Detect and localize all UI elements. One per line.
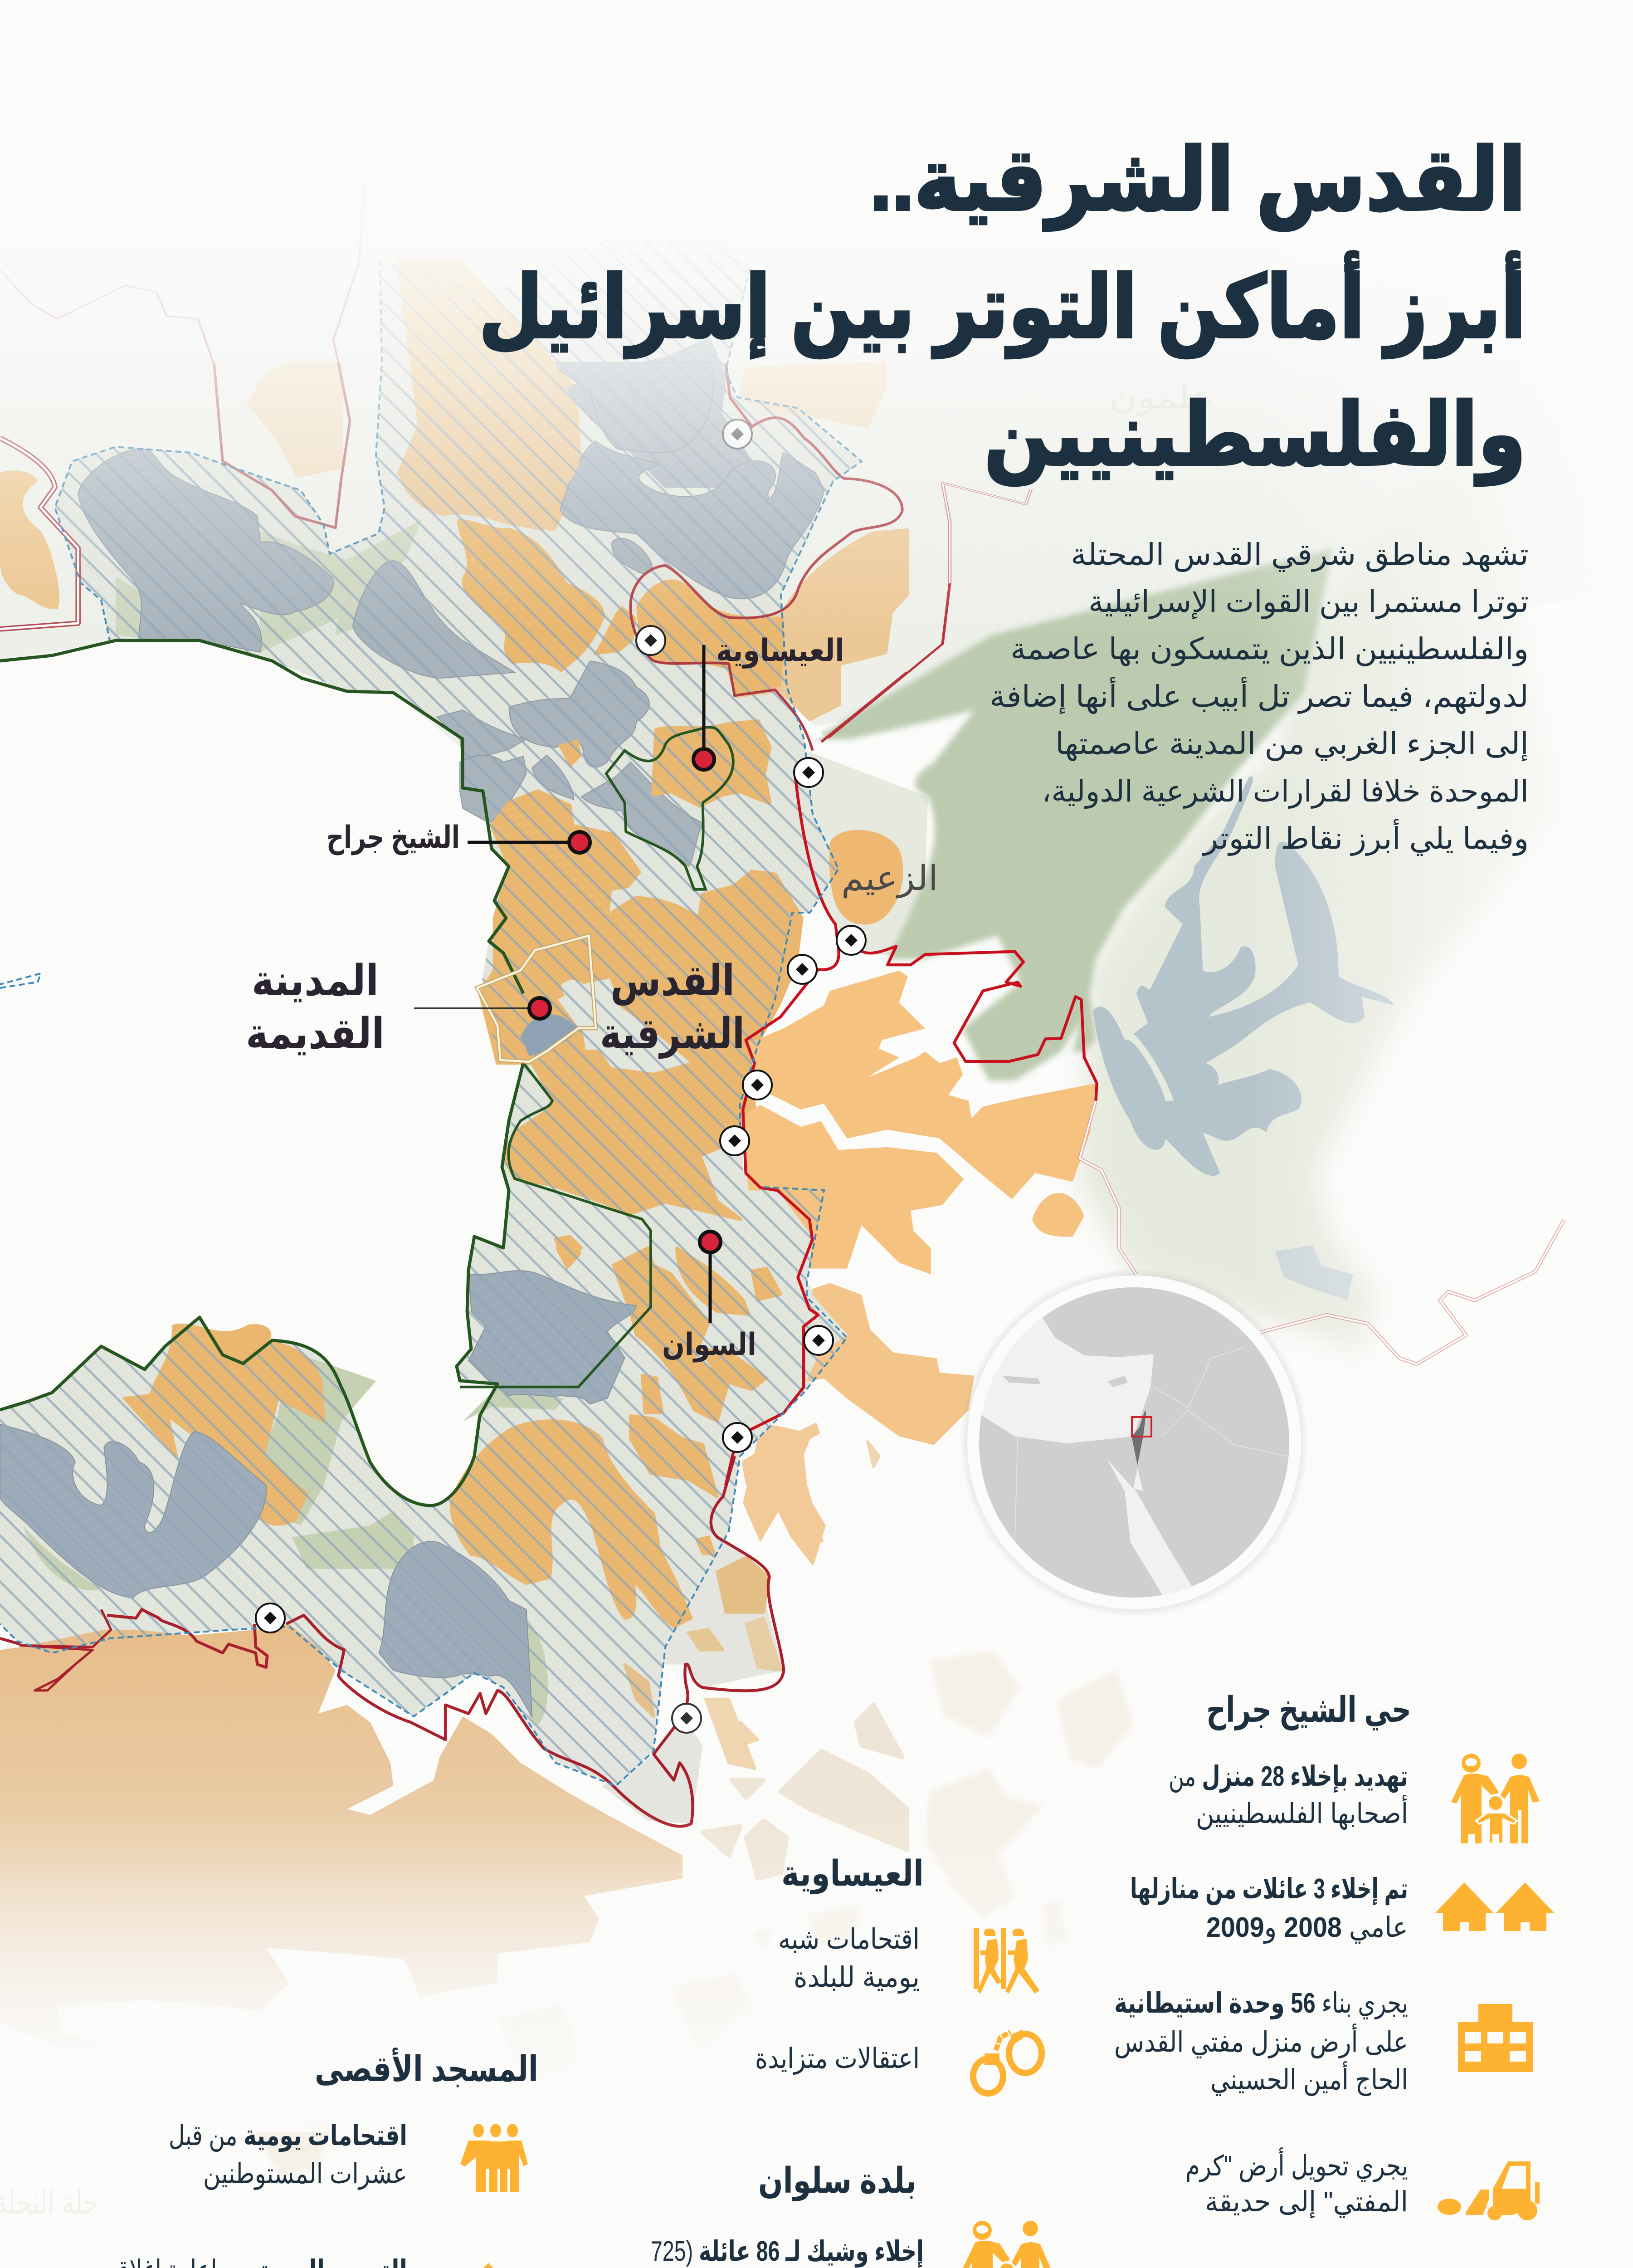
marker 10 [672, 1704, 701, 1733]
item text 3: يجري بناء 56 وحدة استيطانية [1114, 1988, 1408, 2019]
old city wall [477, 936, 596, 1062]
icon: two houses [1435, 1882, 1554, 1931]
intro paragraph [990, 538, 1529, 856]
heading: حي الشيخ جراح [1206, 1690, 1411, 1730]
icon: family [962, 2221, 1051, 2268]
border hints [1015, 1347, 1290, 1542]
outer tan shapes [249, 363, 885, 476]
intro paragraph: توترا مستمرا بين القوات الإسرائيلية [1088, 585, 1529, 619]
blue dashed lines [0, 261, 862, 1786]
marker 5 [788, 955, 817, 984]
inset white ring [967, 1276, 1301, 1609]
eastern land shapes [743, 777, 1394, 1542]
item text 3 [1114, 1988, 1408, 2096]
callout: Old City pin [414, 998, 550, 1019]
item text 1 [169, 2120, 407, 2190]
faint north-west border [0, 182, 365, 363]
panel: Al-Aqsa Mosque [109, 2048, 538, 2268]
icon: building [1458, 2004, 1533, 2072]
northern land shapes [401, 261, 750, 528]
intro paragraph: إلى الجزء الغربي من المدينة عاصمتها [1055, 727, 1529, 762]
label: Old City: القديمة [246, 1010, 385, 1057]
item text 2: تم إخلاء 3 عائلات من منازلها [1130, 1873, 1408, 1905]
red borders [0, 182, 1097, 1826]
item text 1: تهديد بإخلاء 28 منزل من [1169, 1761, 1408, 1793]
hatched zone base [0, 240, 862, 1786]
item text 2: اعتقالات متزايدة [755, 2043, 920, 2075]
title: والفلسطينيين [984, 387, 1526, 486]
eastern desert water-shaped grey area [1093, 777, 1394, 1176]
icon: handcuffs [973, 2029, 1042, 2093]
western enclave [0, 470, 59, 609]
label: Old City: المدينة [252, 957, 379, 1004]
item text 2 [1130, 1873, 1408, 1944]
Palestine highlight [1131, 1410, 1146, 1465]
label: East Jerusalem: القدس [610, 957, 735, 1006]
icon: warning [454, 2263, 523, 2268]
inset shadow [960, 1268, 1309, 1617]
item text 1: أصحابها الفلسطينيين [1196, 1795, 1408, 1830]
callout: Silwan pin [700, 1232, 721, 1323]
panel: Sheikh Jarrah [1114, 1690, 1554, 2220]
label: Sheikh Jarrah: الشيخ جراح [327, 820, 460, 855]
south red line [0, 1456, 784, 1826]
north-east red and double line [828, 483, 1031, 738]
label: Silwan: السوان [662, 1327, 756, 1363]
callout: Sheikh Jarrah pin [468, 832, 590, 853]
locator map inset [946, 1268, 1309, 1618]
marker 3 [794, 758, 823, 787]
inner green boundary [460, 728, 733, 1387]
marker 11 [256, 1603, 285, 1633]
orange built areas inside zone [399, 363, 907, 1270]
marker 9 [723, 1423, 752, 1452]
marker 4 [837, 926, 866, 955]
dark green boundary [0, 640, 523, 1505]
northern pale land [0, 0, 1633, 748]
marker 2 [636, 626, 665, 655]
label: Isawiya: العيساوية [716, 633, 844, 669]
marker 6 [743, 1070, 772, 1100]
checkpoint markers [256, 420, 866, 1733]
marker 7 [720, 1126, 749, 1155]
marker 1 [723, 420, 752, 449]
south large area [0, 1424, 907, 2046]
main red line [726, 774, 1097, 1486]
intro paragraph: وفيما يلي أبرز نقاط التوتر [1202, 819, 1529, 856]
old city pale interior patch [561, 980, 595, 1028]
grey built areas [78, 363, 824, 866]
item text 1: يومية للبلدة [794, 1962, 920, 1994]
marker 8 [804, 1326, 833, 1355]
eastern land shading [726, 404, 1564, 1353]
intro paragraph: والفلسطينيين الذين يتمسكون بها عاصمة [1010, 632, 1529, 666]
label: East Jerusalem [600, 957, 745, 1059]
label: East Jerusalem: الشرقية [600, 1010, 745, 1059]
item text 4 [1185, 2147, 1408, 2219]
central grey and orange blobs [0, 363, 907, 1270]
label: Al-Zaim: الزعيم [841, 859, 938, 899]
item text 1: اقتحامات شبه [778, 1924, 920, 1955]
heading: المسجد الأقصى [315, 2048, 538, 2089]
faint place names: علمون [1109, 380, 1214, 416]
old city grey area [521, 1014, 579, 1056]
intro paragraph: لدولتهم، فيما تصر تل أبيب على أنها إضافة [990, 677, 1529, 714]
green patches [116, 519, 422, 652]
faint south-east islands [254, 1651, 1134, 2177]
heading: العيساوية [781, 1853, 924, 1894]
panel: Al-Isawiya [755, 1853, 1042, 2093]
west enclave double line [0, 438, 78, 629]
item text 2: عامي 2008 و2009 [1206, 1912, 1408, 1944]
panel: Silwan [622, 2160, 1067, 2268]
item text 3: على أرض منزل مفتي القدس [1114, 2024, 1408, 2058]
icon: settlers [460, 2124, 528, 2192]
item text 1: عشرات المستوطنين [203, 2158, 407, 2190]
item text 3: الحاج أمين الحسيني [1210, 2061, 1408, 2096]
title [479, 132, 1526, 486]
south grey unhatched area [497, 1537, 784, 1823]
item text 1 [1169, 1761, 1408, 1830]
item text 1: إخلاء وشيك لـ 86 عائلة (725 [651, 2236, 924, 2268]
intro paragraph: الموحدة خلافا لقرارات الشرعية الدولية، [1042, 774, 1529, 809]
label: Old City [246, 957, 385, 1057]
item text 4: يجري تحويل أرض "كرم [1185, 2147, 1408, 2182]
icon: bulldozer [1438, 2161, 1540, 2220]
heading: بلدة سلوان [758, 2160, 916, 2201]
item text 4: المفتي" إلى حديقة [1205, 2186, 1408, 2219]
item text 1 [778, 1924, 920, 1994]
inset red locator [1132, 1417, 1151, 1437]
intro paragraph: تشهد مناطق شرقي القدس المحتلة [1071, 538, 1529, 572]
title: القدس الشرقية.. [870, 132, 1526, 231]
icon: family [1451, 1754, 1540, 1843]
faint distant boundary [1080, 1101, 1564, 1364]
inset land and sea [979, 1287, 1289, 1598]
north border [214, 363, 907, 751]
callout: Isawiya pin [693, 645, 714, 770]
faint place names [0, 380, 1214, 2220]
hatch overlay [0, 240, 862, 1786]
item text 1: اقتحامات يومية من قبل [169, 2120, 407, 2152]
southern zone blobs [0, 1237, 781, 1725]
icon: forced raid [974, 1928, 1039, 1994]
